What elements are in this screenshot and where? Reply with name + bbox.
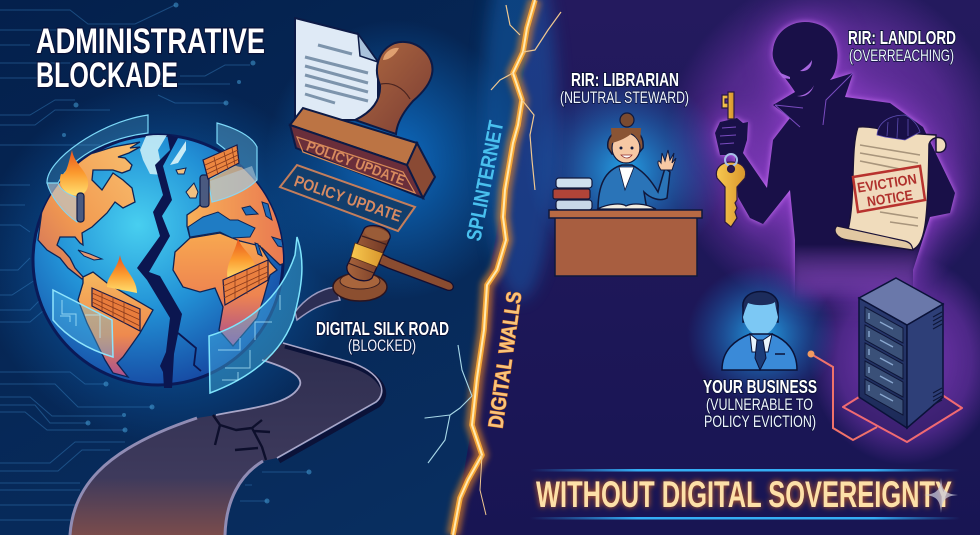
land: eurasia	[187, 165, 292, 265]
title: administrative blockade	[36, 22, 265, 95]
circuit board lines	[0, 5, 308, 520]
landlord silhouette	[715, 22, 955, 300]
stack of books	[553, 178, 592, 210]
label: rir librarian: (NEUTRAL STEWARD)	[560, 88, 689, 107]
eviction stamp	[853, 166, 925, 212]
label: digital silk road: DIGITAL SILK ROAD	[316, 319, 449, 339]
label: splinternet: SPLINTERNET	[463, 119, 508, 243]
golden key	[716, 92, 746, 227]
document	[295, 18, 378, 120]
hologram rings around globe	[47, 115, 302, 393]
title: administrative blockade: BLOCKADE	[36, 56, 178, 95]
british isles	[176, 168, 198, 198]
stamp	[290, 42, 435, 198]
eviction stamp: NOTICE	[866, 187, 914, 210]
firewall posts	[77, 175, 209, 222]
globe fracture	[137, 134, 182, 388]
gavel	[333, 225, 453, 301]
landlord coat highlights	[720, 73, 853, 144]
librarian at desk	[549, 113, 702, 276]
globe	[33, 134, 292, 388]
landlord eyes and smile	[778, 60, 814, 96]
lightning divider	[425, 0, 561, 535]
label: rir librarian: RIR: LIBRARIAN	[571, 70, 679, 90]
label: digital silk road: (BLOCKED)	[348, 336, 416, 355]
flames	[60, 150, 256, 293]
label: your business: POLICY EVICTION)	[704, 412, 816, 431]
brick walls	[92, 145, 268, 331]
road crack	[213, 415, 270, 460]
ice caps	[140, 135, 167, 175]
globe fracture branch	[178, 333, 201, 371]
sparkle watermark	[924, 478, 958, 513]
label: digital walls: DIGITAL WALLS	[485, 290, 526, 430]
landlord hand on scroll	[877, 115, 920, 140]
eviction notice scroll	[835, 115, 946, 250]
land: north america	[38, 142, 140, 279]
stamped policy update label: POLICY UPDATE	[292, 173, 403, 226]
open book	[597, 204, 656, 209]
business person icon	[722, 292, 797, 370]
circuit board nodes	[62, 2, 312, 504]
label: your business: YOUR BUSINESS	[703, 377, 817, 397]
eviction stamp: EVICTION	[856, 170, 918, 196]
land: africa	[173, 233, 277, 346]
label: rir librarian	[560, 70, 689, 107]
librarian figure	[598, 113, 676, 210]
land: caribbean islands	[78, 250, 102, 260]
seas	[188, 212, 255, 238]
label: digital silk road	[316, 319, 449, 355]
label: your business: (VULNERABLE TO	[706, 395, 813, 414]
server rack with network trace	[808, 278, 962, 442]
desk	[549, 210, 702, 276]
title: administrative blockade: ADMINISTRATIVE	[36, 22, 265, 61]
label: rir landlord	[848, 28, 956, 65]
label: your business	[703, 377, 817, 431]
road: digital silk road	[70, 287, 384, 535]
stamp face text: POLICY UPDATE	[304, 139, 408, 189]
land: south america	[78, 272, 153, 377]
